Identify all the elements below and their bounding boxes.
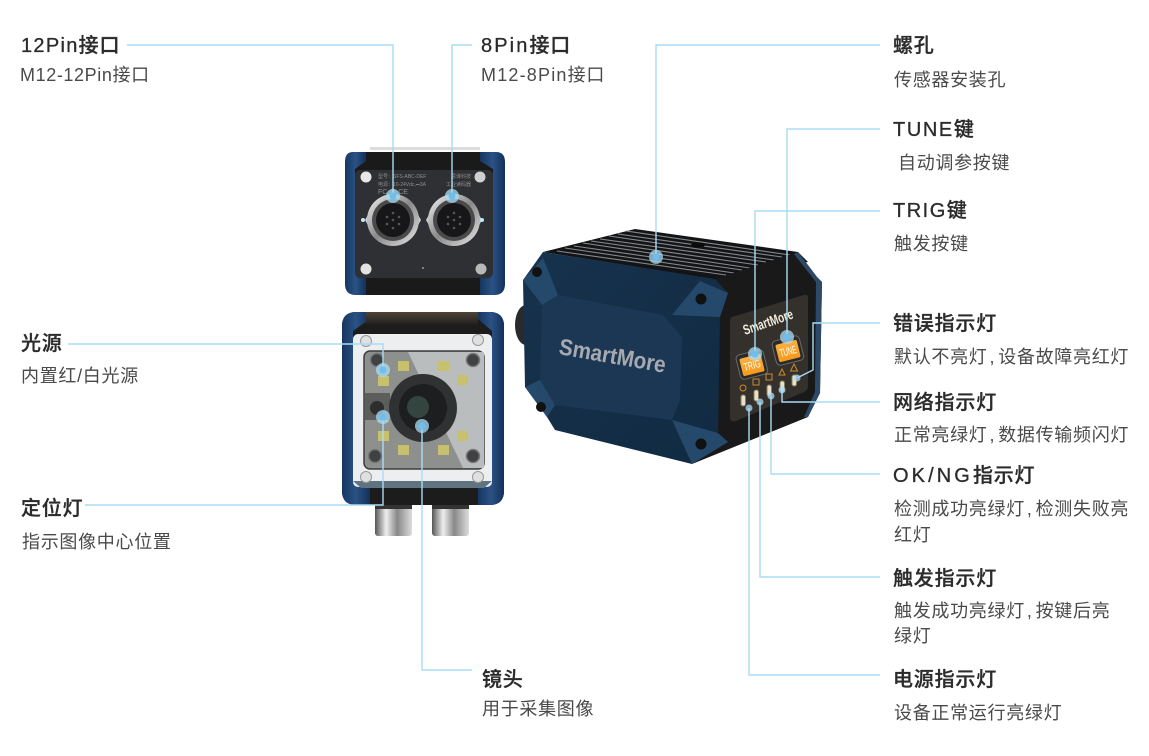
label: 错误指示灯	[893, 312, 1129, 367]
label: TUNE: TUNE键	[893, 118, 975, 141]
callout markers	[376, 189, 800, 433]
label: 镜头: 镜头	[482, 668, 524, 691]
device: front view with lens	[342, 312, 504, 536]
plate text	[378, 173, 471, 196]
LEDs	[378, 361, 468, 455]
label: 定位灯	[21, 497, 172, 552]
label: TUNE	[893, 118, 1010, 173]
label: 光源: 光源	[21, 332, 63, 355]
label: 定位灯: 指示图像中心位置	[22, 532, 172, 552]
label: 触发指示灯: 绿灯	[894, 626, 931, 646]
plate text: FC ⊘ CE	[378, 188, 408, 196]
lens	[389, 374, 457, 442]
label: OK/NG: 检测成功亮绿灯,检测失败亮	[894, 499, 1129, 519]
label: 错误指示灯: 错误指示灯	[893, 312, 997, 335]
button: TUNE: TUNE	[779, 344, 798, 360]
label: 螺孔: 螺孔	[893, 34, 935, 57]
display panel	[730, 295, 808, 422]
label: 12Pin	[20, 34, 150, 85]
label: 电源指示灯	[893, 668, 1062, 723]
top fins	[543, 229, 808, 280]
callout lines	[68, 45, 880, 675]
device: rear view with connectors	[345, 147, 505, 295]
button: TRIG	[735, 349, 768, 380]
label: 8Pin	[481, 34, 605, 85]
label: 光源: 内置红/白光源	[21, 366, 139, 386]
label: 电源指示灯: 电源指示灯	[893, 668, 997, 691]
button: TUNE	[771, 335, 804, 366]
black control face	[692, 252, 822, 464]
plate text: 电源：10-24Vdc,⎓3A	[378, 181, 427, 188]
indicator icons	[740, 364, 798, 391]
label: 触发指示灯: 触发成功亮绿灯,按键后亮	[894, 601, 1110, 621]
label: 12Pin: 12Pin接口	[21, 34, 120, 57]
label: 错误指示灯: 默认不亮灯,设备故障亮红灯	[894, 347, 1129, 367]
device: angled view	[515, 229, 822, 464]
plate text: 型号：SFS-ABC-DEF	[378, 173, 426, 180]
label: 8Pin: M12-8Pin接口	[481, 65, 605, 85]
button: TRIG: TRIG	[743, 358, 762, 374]
indicator lights	[741, 375, 796, 406]
label: 触发指示灯: 触发指示灯	[893, 567, 997, 590]
label: OK/NG: OK/NG指示灯	[893, 464, 1035, 487]
plate text: 思谋科技	[451, 173, 471, 180]
label: TRIG: TRIG键	[893, 199, 968, 222]
connector: 8Pin	[426, 194, 482, 246]
label: 定位灯: 定位灯	[21, 497, 83, 520]
label: 光源	[21, 332, 139, 386]
plate text: 工业读码器	[446, 181, 471, 188]
label: 螺孔	[893, 34, 1006, 90]
logo: SmartMore on side: SmartMore	[557, 333, 668, 378]
label: 螺孔: 传感器安装孔	[894, 70, 1006, 90]
label: TRIG: 触发按键	[894, 234, 969, 254]
logo: SmartMore on panel: SmartMore	[741, 306, 795, 338]
label: 电源指示灯: 设备正常运行亮绿灯	[894, 703, 1062, 723]
label: 网络指示灯: 网络指示灯	[893, 390, 997, 414]
label: 12Pin: M12-12Pin接口	[20, 65, 150, 85]
label: 镜头: 用于采集图像	[482, 699, 594, 719]
connector: 12Pin	[365, 194, 421, 246]
label: OK/NG	[893, 464, 1129, 545]
label: 网络指示灯: 正常亮绿灯,数据传输频闪灯	[894, 425, 1129, 445]
label: 网络指示灯	[893, 390, 1129, 445]
label: OK/NG: 红灯	[894, 525, 931, 545]
label: 8Pin: 8Pin接口	[481, 34, 571, 57]
label: 镜头	[482, 668, 594, 719]
label: TUNE: 自动调参按键	[898, 153, 1010, 173]
blue housing	[523, 252, 728, 464]
label: 触发指示灯	[893, 567, 1110, 646]
label: TRIG	[893, 199, 969, 254]
